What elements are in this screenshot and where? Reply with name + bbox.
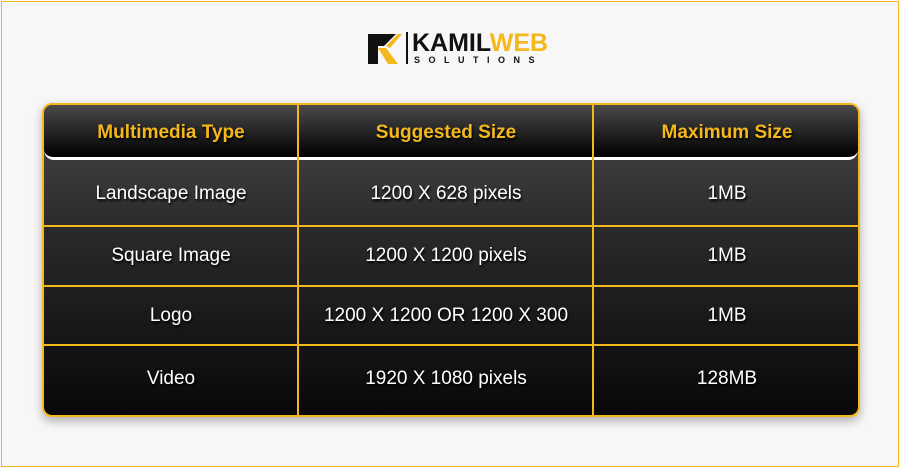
header row [44,105,858,160]
table: 1920 X 1080 pixels [365,368,527,389]
table: 1MB [707,182,747,204]
logo [368,29,548,65]
logo: SOLUTIONS [414,55,543,65]
table: 1200 X 1200 pixels [365,245,527,266]
table: 1MB [707,245,747,266]
table: 1200 X 628 pixels [370,182,522,204]
icon: K logo [368,34,402,64]
row: square: Square Image [111,245,231,266]
row: video: Video [147,368,195,389]
table [42,103,860,417]
table: 128MB [697,368,757,389]
table: Suggested Size [376,122,516,142]
table: 1MB [707,304,747,326]
table: Maximum Size [662,122,792,142]
row: logo: Logo [150,304,192,326]
table: 1200 X 1200 OR 1200 X 300 [324,304,568,326]
logo: KAMILWEB [412,29,548,57]
row: landscape: Landscape Image [95,182,247,204]
table: Multimedia Type [97,122,245,142]
